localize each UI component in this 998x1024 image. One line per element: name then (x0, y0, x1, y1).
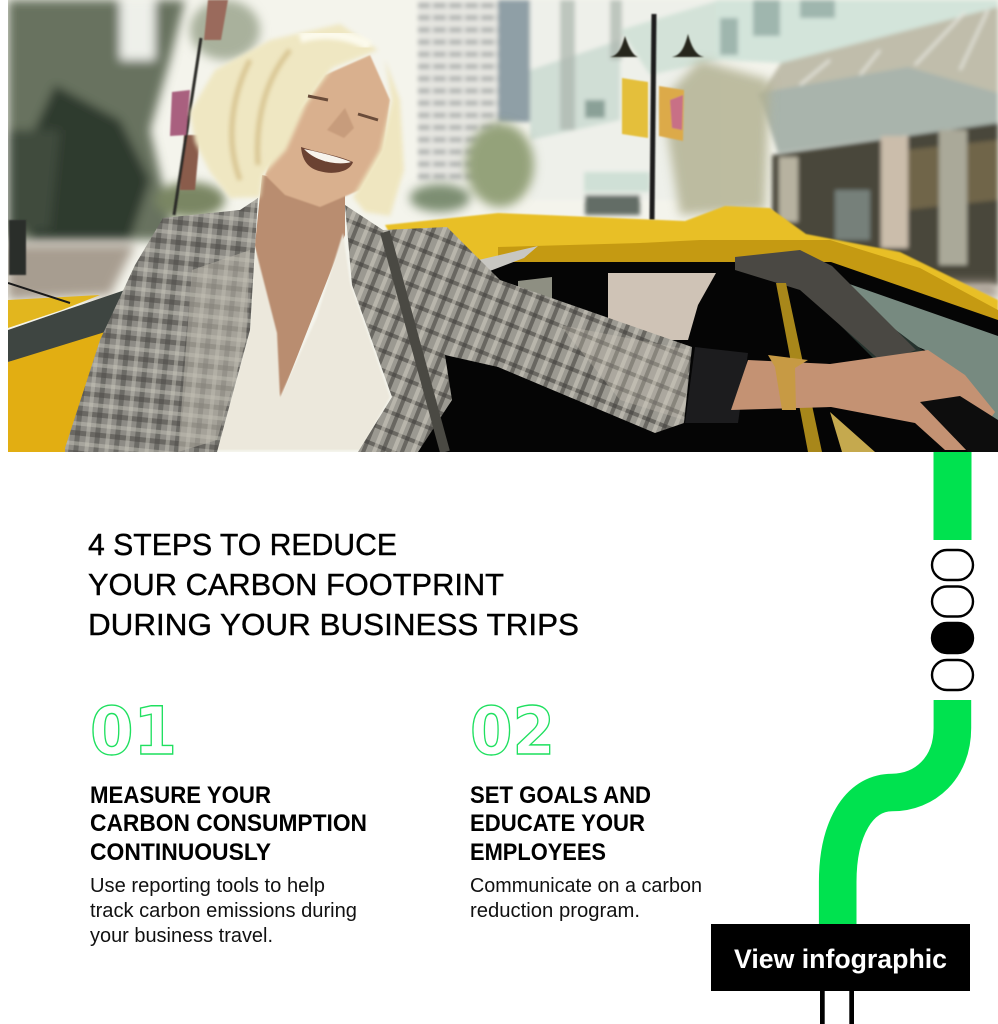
green route line: top segment (934, 452, 972, 540)
step 02 text: Communicate on a carbon (470, 875, 702, 897)
step 01 (90, 693, 367, 947)
step 02 text: reduction program. (470, 900, 640, 922)
woman: white blouse (217, 233, 390, 450)
step 01 heading (90, 782, 367, 866)
step 01 text: Use reporting tools to help (90, 875, 325, 897)
step 02 heading (470, 782, 651, 866)
heading: YOUR CARBON FOOTPRINT (88, 567, 504, 602)
step 02 heading: EMPLOYEES (470, 839, 606, 866)
step 01 text: track carbon emissions during (90, 900, 357, 922)
heading: DURING YOUR BUSINESS TRIPS (88, 607, 579, 642)
number 02: 02 (470, 693, 555, 770)
step progress pills (932, 550, 973, 690)
button: view infographic (711, 924, 970, 991)
woman: hair, face and neck (190, 24, 404, 400)
step 01 heading: CARBON CONSUMPTION (90, 810, 367, 837)
step 01 text: your business travel. (90, 925, 273, 947)
hero photo: woman at yellow taxi (8, 0, 998, 452)
heading (88, 527, 579, 642)
yellow taxi (8, 206, 998, 452)
step 01 heading: MEASURE YOUR (90, 782, 271, 809)
step 02 (470, 693, 702, 922)
step 01 text (90, 875, 357, 947)
woman: plaid jacket and arm (65, 198, 998, 452)
step 02 heading: EDUCATE YOUR (470, 810, 645, 837)
green route line: curved segment (838, 700, 952, 926)
step 02 heading: SET GOALS AND (470, 782, 651, 809)
button: view infographic: View infographic (734, 944, 947, 974)
heading: 4 STEPS TO REDUCE (88, 527, 397, 562)
background: street and buildings (8, 0, 998, 452)
number 01: 01 (90, 693, 177, 770)
step 01 heading: CONTINUOUSLY (90, 839, 271, 866)
black twin lines under button (820, 990, 854, 1024)
step 02 text (470, 875, 702, 922)
